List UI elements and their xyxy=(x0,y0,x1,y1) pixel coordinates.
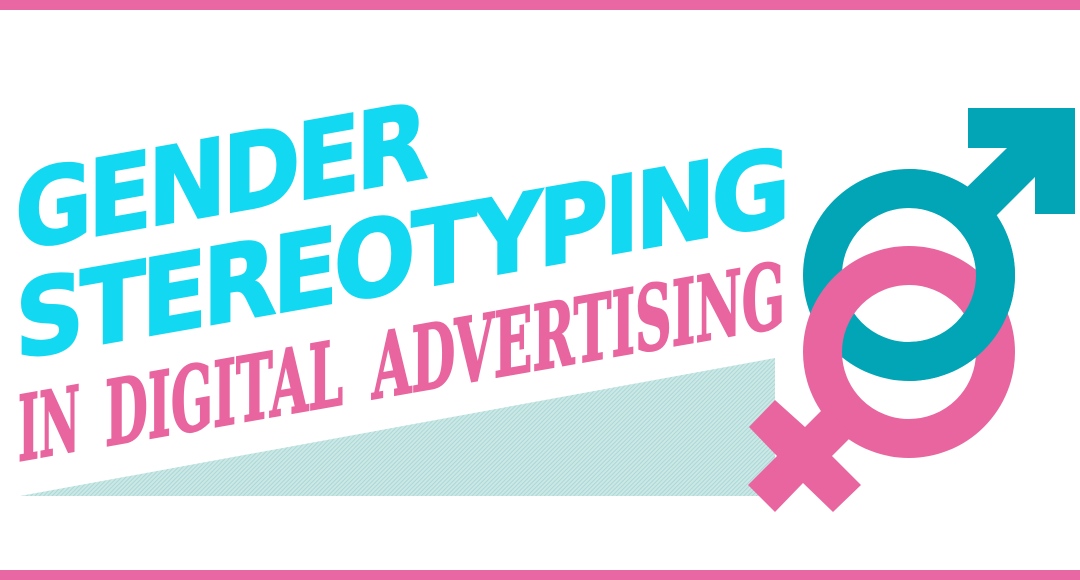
heading: STEREOTYPING: STEREOTYPING xyxy=(15,126,786,385)
heading: GENDER: GENDER xyxy=(15,80,427,276)
hatched shadow wedge xyxy=(20,358,775,496)
icon: female symbol xyxy=(748,266,996,512)
top border xyxy=(0,0,1080,10)
subheading: in digital advertising: IN xyxy=(18,367,80,483)
subheading: in digital advertising: DIGITAL xyxy=(105,321,343,468)
bottom border xyxy=(0,570,1080,580)
male ring interlock overlay xyxy=(910,169,1015,381)
icon: male symbol xyxy=(822,108,1075,362)
subheading: in digital advertising xyxy=(18,243,785,483)
